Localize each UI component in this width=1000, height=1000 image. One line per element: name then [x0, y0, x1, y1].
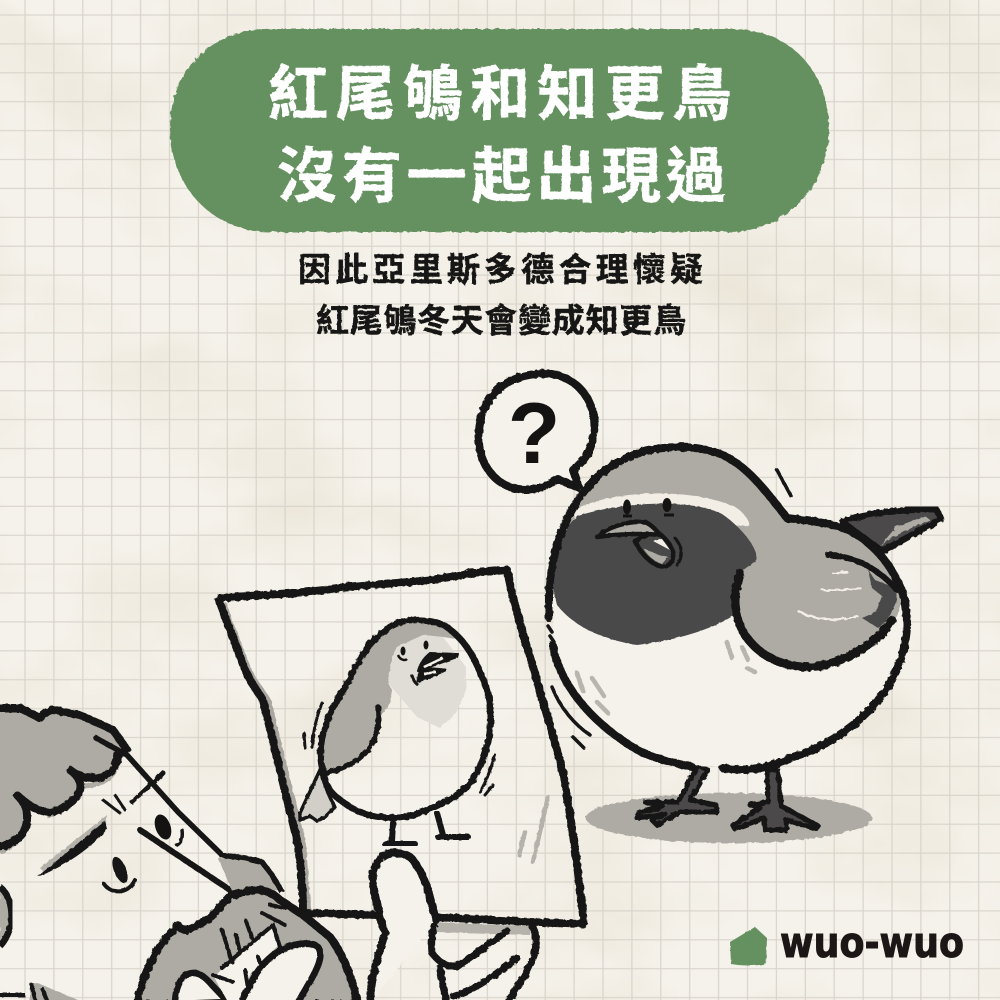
title text [268, 46, 732, 215]
knuckle shapes [432, 926, 536, 1000]
moustache and beard [137, 890, 358, 1000]
pointing hand [370, 853, 536, 1000]
held paper sheet with drawing [218, 570, 584, 924]
eye [152, 812, 174, 842]
wing tip dark [862, 570, 897, 628]
tail [300, 770, 335, 821]
speech bubble with question mark: ? [508, 386, 560, 482]
subtitle text: 紅尾鴝冬天會變成知更鳥 [316, 294, 686, 342]
subtitle text [298, 243, 703, 342]
house icon [730, 927, 767, 966]
grey head, back and wing [556, 445, 901, 668]
pale breast patch [388, 635, 466, 728]
face lines [96, 738, 233, 892]
title text: 沒有一起出現過 [277, 128, 726, 215]
speech bubble with question mark [479, 374, 594, 489]
motion lines [548, 470, 791, 748]
hair shadow [0, 760, 117, 852]
wordmark: wuo-wuo [780, 918, 964, 967]
lower left strokes [0, 983, 48, 1000]
bird eyes [623, 498, 674, 516]
eyes [398, 640, 428, 660]
grey feather marks [577, 642, 755, 713]
bird beak [597, 522, 681, 567]
lower left grey patch [30, 982, 85, 1000]
cheek mark [104, 855, 135, 891]
bird legs and feet [637, 765, 818, 830]
tail [842, 509, 941, 551]
paper shine marks [519, 797, 548, 862]
cheek dash [0, 960, 15, 966]
large bird: redstart [548, 445, 941, 843]
eyebrow [37, 815, 107, 877]
motion lines [304, 703, 495, 795]
grey shadow under paper [433, 922, 532, 935]
title banner [170, 29, 829, 232]
person looking at drawing [0, 708, 358, 1000]
white collar band [574, 493, 750, 526]
title text: 紅尾鴝和知更鳥 [268, 46, 732, 133]
finger [370, 853, 436, 1000]
wing line [325, 707, 379, 773]
beak and mouth [412, 653, 458, 685]
paper outline [218, 570, 584, 924]
head cap and wing grey [322, 622, 462, 772]
legs [385, 813, 468, 844]
paper shadow along left edge [223, 604, 308, 915]
hair [0, 708, 127, 848]
left cheek outline [0, 887, 12, 946]
body fill and lower outline [553, 560, 907, 766]
fingers gaps in beard [175, 925, 320, 1000]
nose tip grey [218, 858, 280, 893]
subtitle text: 因此亞里斯多德合理懷疑 [298, 243, 703, 291]
beard hair strokes [213, 905, 285, 988]
head and back outline [549, 447, 905, 618]
wing outline and feathers [735, 555, 897, 667]
body outline [320, 620, 491, 818]
small drawn bird: robin [300, 620, 495, 844]
black face mask [552, 504, 757, 645]
ground shadow [586, 793, 872, 843]
logo [730, 918, 964, 967]
